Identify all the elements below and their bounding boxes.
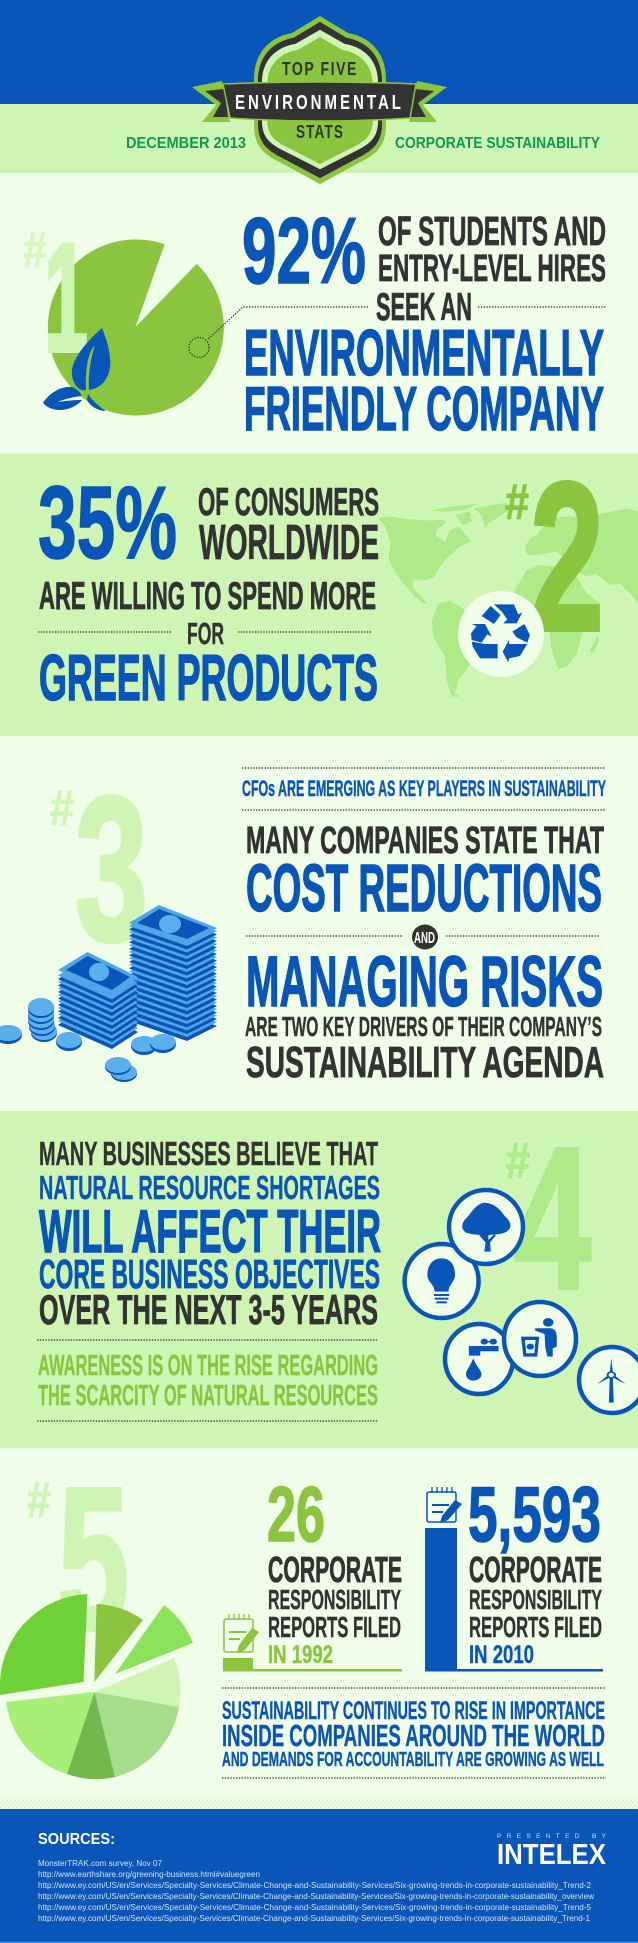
hash 2: # <box>505 474 529 530</box>
numeral 4: 4 <box>514 1105 591 1331</box>
icon: blue notepad <box>427 1487 462 1523</box>
divider with for: FOR <box>187 617 224 651</box>
footer <box>0 1809 638 1943</box>
coins <box>0 998 176 1082</box>
sources list: http://www.ey.com/US/en/Services/Specialty-Services/Climate-Change-and-Sustainability-Services/Six-growing-trends-in-corporate-sustainability_Trend-1 <box>38 1913 590 1923</box>
icon: wind turbine <box>579 1347 638 1413</box>
footer background <box>0 1809 638 1943</box>
large stack <box>129 905 217 1041</box>
hash 1: # <box>23 222 47 278</box>
icon: leaves <box>43 328 110 411</box>
sources list <box>38 1858 595 1923</box>
sources list: http://www.ey.com/US/en/Services/Specialty-Services/Climate-Change-and-Sustainability-Services/Six-growing-trends-in-corporate-sustainability_Trend-5 <box>38 1902 591 1912</box>
header date: DECEMBER 2013 <box>126 135 246 152</box>
stat: 26: 26 <box>267 1470 325 1558</box>
numeral 1: 1 <box>44 211 88 384</box>
sources list: http://www.ey.com/US/en/Services/Specialty-Services/Climate-Change-and-Sustainability-Services/Six-growing-trends-in-corporate-sustainability_Trend-2 <box>38 1880 591 1890</box>
icon: tree <box>449 1190 523 1264</box>
presented by: PRESENTED BY <box>497 1833 607 1840</box>
panel: stat 3 <box>0 754 606 1087</box>
callout leader line <box>189 307 606 358</box>
text: green products: GREEN PRODUCTS <box>39 641 378 714</box>
header band: light green <box>0 104 638 173</box>
badge ribbon tails <box>192 81 447 122</box>
world map <box>378 503 638 697</box>
text: scarcity: THE SCARCITY OF NATURAL RESOURCES <box>38 1380 378 1412</box>
numeral 3: 3 <box>75 754 148 984</box>
icon: green notepad <box>224 1614 259 1653</box>
sources list: http://www.ey.com/US/en/Services/Specialty-Services/Climate-Change-and-Sustainability-Services/Six-growing-trends-in-corporate-sustainability_overview <box>38 1891 595 1901</box>
bar: 2010 <box>425 1528 603 1672</box>
divider with and <box>246 924 600 950</box>
panel: stat 5 <box>0 1445 606 1779</box>
text: are willing to spend more: ARE WILLING TO SPEND MORE <box>39 575 376 618</box>
pie with wedge <box>48 239 224 415</box>
icon: recycling bin and person <box>504 1302 576 1376</box>
text: in 1992: IN 1992 <box>268 1641 333 1669</box>
badge shield layers <box>254 16 386 184</box>
text: worldwide: WORLDWIDE <box>199 516 379 570</box>
icon: light bulb <box>405 1244 479 1318</box>
text: many businesses believe that: MANY BUSINESSES BELIEVE THAT <box>39 1135 378 1172</box>
text: responsibility 1992: RESPONSIBILITY <box>268 1584 401 1615</box>
panel: stat 1 <box>23 198 606 444</box>
panel: stat 2 <box>38 438 638 714</box>
pie chart <box>0 1594 193 1779</box>
badge text: stats: STATS <box>296 122 344 142</box>
badge text: top five: TOP FIVE <box>282 59 358 79</box>
icon: water tap <box>445 1324 513 1394</box>
sources list: http://www.earthshare.org/greening-business.html#valuegreen <box>38 1869 260 1879</box>
numeral 5: 5 <box>58 1445 129 1671</box>
icons: sustainability circles <box>405 1190 638 1413</box>
stat: 92%: 92% <box>242 198 366 303</box>
text: will affect their: WILL AFFECT THEIR <box>39 1198 381 1265</box>
panel background: stat 2 <box>0 454 638 736</box>
text: natural resource shortages: NATURAL RESOURCE SHORTAGES <box>39 1169 380 1206</box>
title badge <box>192 16 447 184</box>
logo: intelex: INTELEX <box>497 1839 607 1871</box>
text: over the next 3-5 years: OVER THE NEXT 3-5 YEARS <box>39 1286 378 1333</box>
header band: blue <box>0 0 638 104</box>
icon: recycle <box>458 591 544 677</box>
hash 3: # <box>50 780 74 836</box>
panel background: stat 4 <box>0 1111 638 1448</box>
hash 4: # <box>506 1133 530 1189</box>
header topic: CORPORATE SUSTAINABILITY <box>395 135 600 152</box>
sources heading: SOURCES: <box>38 1831 115 1848</box>
hash 5: # <box>27 1472 51 1528</box>
small stack <box>58 952 138 1049</box>
stat: 35%: 35% <box>38 465 177 580</box>
text: seek an: SEEK AN <box>376 286 472 329</box>
badge ribbon <box>223 82 416 121</box>
sources list: MonsterTRAK.com survey, Nov 07 <box>38 1858 162 1868</box>
text: corporate 1992: CORPORATE <box>268 1549 402 1590</box>
panel: stat 4 <box>37 1105 638 1421</box>
bar: 1992 <box>223 1658 402 1672</box>
badge text: environmental: ENVIRONMENTAL <box>235 92 404 114</box>
text: in 2010: IN 2010 <box>469 1641 534 1669</box>
text: awareness: AWARENESS IS ON THE RISE REGARDING <box>38 1350 378 1382</box>
divider with and: AND <box>414 930 435 947</box>
text: core business objectives: CORE BUSINESS OBJECTIVES <box>39 1251 380 1297</box>
hatched strip above footer <box>0 1799 638 1809</box>
text: of consumers: OF CONSUMERS <box>198 481 379 524</box>
icon: money stacks and coins <box>0 905 217 1082</box>
text: reports filed 1992: REPORTS FILED <box>268 1612 401 1644</box>
